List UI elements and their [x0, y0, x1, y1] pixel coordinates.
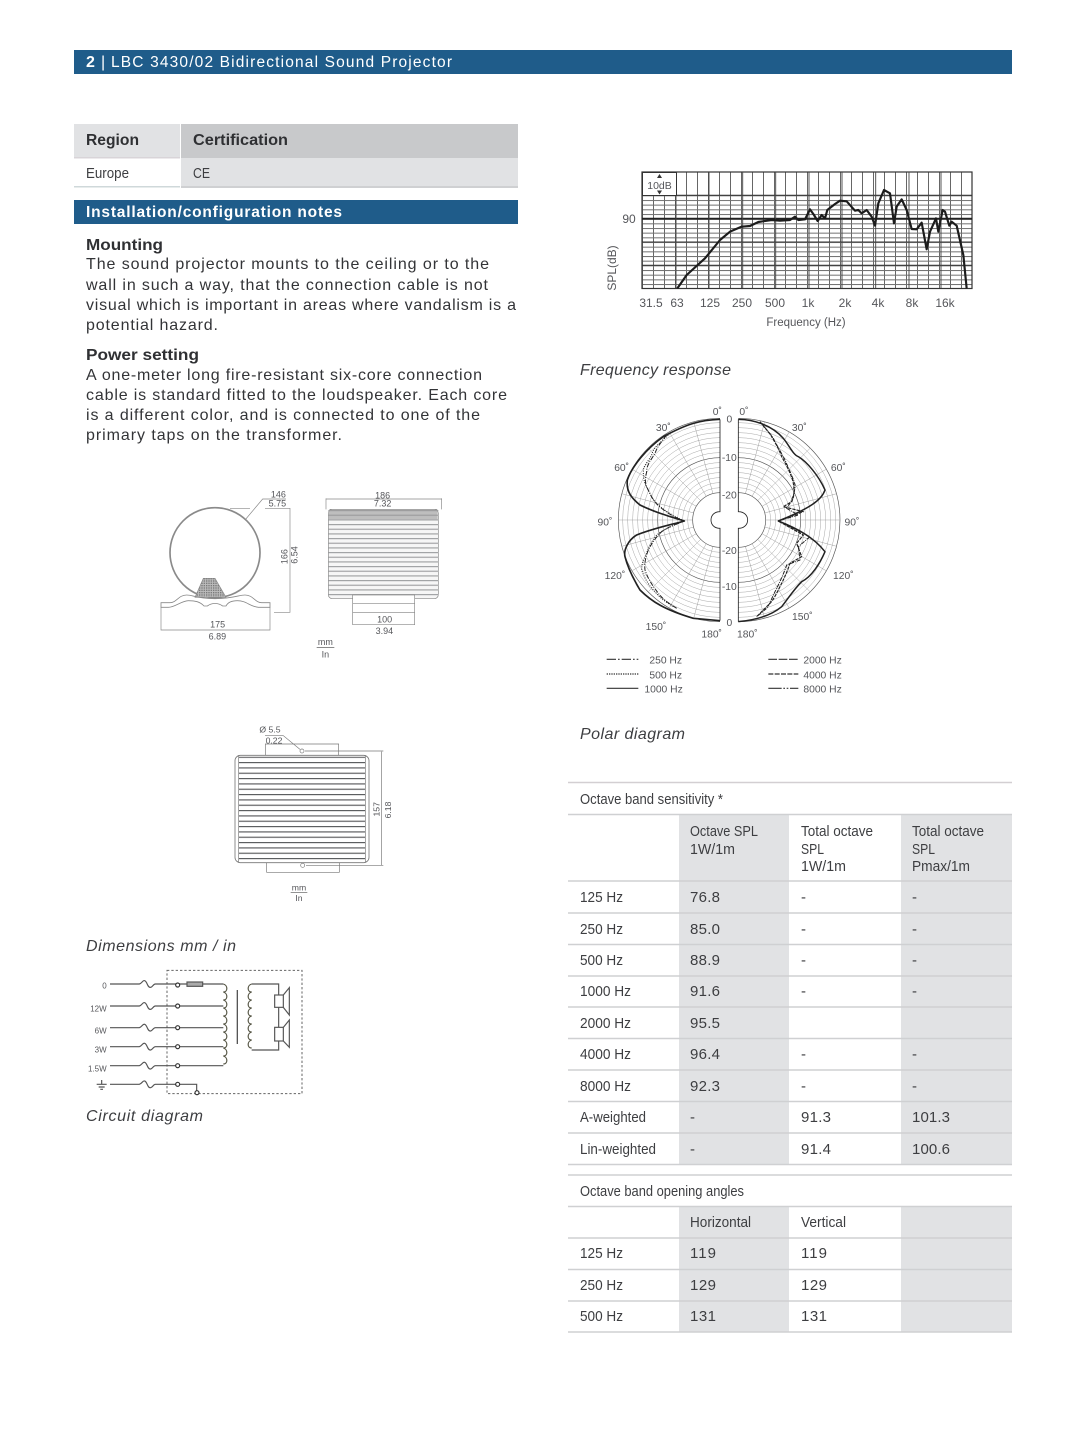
- polar labels: -10: [722, 453, 737, 464]
- text block: mounting: The sound projector mounts to the ceiling or to the: [86, 256, 489, 273]
- table: octave band sensitivity: 100.6: [912, 1141, 950, 1158]
- table: octave band sensitivity: 91.6: [690, 983, 720, 1000]
- section heading: installation notes: Installation/configuration notes: [86, 204, 342, 221]
- table: octave band sensitivity: -: [801, 1046, 806, 1063]
- polar labels: -20: [722, 490, 737, 501]
- polar legend: 4000 Hz: [803, 670, 842, 681]
- table: octave band sensitivity: -: [801, 1078, 806, 1095]
- table: octave band opening angles: 119: [690, 1245, 716, 1262]
- table: octave band sensitivity: Total octave: [801, 823, 873, 840]
- polar labels: 30˚: [792, 422, 807, 434]
- table: octave band sensitivity: -: [801, 952, 806, 969]
- table: octave band sensitivity: 8000 Hz: [580, 1078, 631, 1095]
- certification table: Region: [86, 132, 139, 149]
- certification table: Certification: [193, 132, 288, 149]
- table: octave band opening angles: 131: [801, 1308, 827, 1325]
- table: octave band sensitivity: 85.0: [690, 921, 720, 938]
- circuit diagram: 6W: [95, 1026, 107, 1035]
- table: octave band sensitivity: Total octave: [912, 823, 984, 840]
- dimensions drawing: side and front views: 6.54: [290, 546, 300, 564]
- dimensions drawing: side and front views: 3.94: [376, 626, 393, 636]
- text block: mounting: visual which is important in areas where vandalism is a: [86, 297, 516, 314]
- circuit diagram: 12W: [90, 1005, 107, 1014]
- frequency response chart: 16k: [935, 296, 956, 310]
- circuit diagram: 3W: [95, 1046, 107, 1055]
- table: octave band sensitivity: 101.3: [912, 1109, 950, 1126]
- certification table: Europe: [86, 165, 129, 182]
- polar labels: -10: [722, 582, 737, 593]
- frequency response chart: 90: [622, 212, 636, 226]
- text block: power setting: cable is standard fitted to the loudspeaker. Each core: [86, 387, 507, 404]
- polar labels: 120˚: [605, 570, 625, 582]
- table: octave band opening angles: [568, 1175, 1012, 1332]
- dimensions drawing: side and front views: 7.32: [374, 499, 391, 509]
- text block: power setting: Power setting: [86, 347, 199, 364]
- table: octave band sensitivity: Pmax/1m: [912, 858, 970, 875]
- header bar: LBC 3430/02 Bidirectional Sound Projector: [111, 54, 452, 71]
- text block: power setting: is a different color, and is connected to one of the: [86, 407, 480, 424]
- table: octave band opening angles: 500 Hz: [580, 1308, 623, 1325]
- table: octave band sensitivity: 4000 Hz: [580, 1046, 631, 1063]
- frequency response chart: 125: [700, 296, 720, 310]
- dimensions drawing: side and front views: 100: [377, 614, 392, 624]
- table: octave band sensitivity: SPL: [912, 841, 935, 858]
- table: octave band sensitivity: Octave band sensitivity *: [580, 791, 723, 808]
- polar labels: 180˚: [701, 628, 722, 640]
- table: octave band sensitivity: SPL: [801, 841, 824, 858]
- dimensions drawing: side and front views: [161, 490, 442, 659]
- polar legend: 500 Hz: [649, 670, 682, 681]
- polar labels: 90˚: [598, 517, 612, 529]
- table: octave band sensitivity: 1W/1m: [801, 858, 846, 875]
- header bar: 2: [86, 54, 95, 71]
- table: octave band sensitivity: -: [690, 1141, 695, 1158]
- dimensions drawing: side and front views: 5.75: [269, 499, 286, 509]
- left half grid: [618, 418, 720, 622]
- table: octave band sensitivity: 88.9: [690, 952, 720, 969]
- table: octave band sensitivity: 95.5: [690, 1015, 720, 1032]
- table: octave band sensitivity: [568, 782, 1012, 1164]
- frequency response chart: 31.5: [639, 296, 663, 310]
- table: octave band opening angles: 129: [801, 1277, 827, 1294]
- table: octave band sensitivity: 96.4: [690, 1046, 720, 1063]
- polar legend: 2000 Hz: [803, 656, 842, 667]
- circuit diagram: 0: [102, 982, 107, 991]
- table: octave band opening angles: Vertical: [801, 1214, 846, 1231]
- frequency response chart: 4k: [872, 296, 885, 310]
- polar labels: 30˚: [656, 422, 671, 434]
- table: octave band sensitivity: -: [801, 983, 806, 1000]
- polar legend: 250 Hz: [649, 656, 682, 667]
- dimensions drawing: side and front views: 6.89: [209, 631, 226, 641]
- dimensions drawing: top view: 6.18: [383, 801, 393, 818]
- table: octave band sensitivity: A-weighted: [580, 1109, 646, 1126]
- polar labels: 0: [726, 415, 732, 426]
- dimensions drawing: side and front views: 186: [375, 490, 390, 500]
- polar labels: 150˚: [646, 621, 666, 633]
- table: octave band opening angles: Horizontal: [690, 1214, 751, 1231]
- caption: dimensions: Dimensions mm / in: [86, 938, 236, 955]
- table: octave band sensitivity: 2000 Hz: [580, 1015, 631, 1032]
- polar labels: 0˚: [713, 406, 722, 418]
- table: octave band sensitivity: 125 Hz: [580, 889, 623, 906]
- section heading: installation notes: [74, 200, 518, 224]
- polar labels: 60˚: [831, 462, 846, 474]
- dimensions drawing: top view: 0.22: [266, 735, 283, 745]
- polar labels: 180˚: [737, 628, 758, 640]
- frequency response chart: 250: [732, 296, 752, 310]
- table: octave band sensitivity: -: [801, 889, 806, 906]
- dimensions drawing: top view: [235, 725, 393, 903]
- table: octave band opening angles: 125 Hz: [580, 1245, 623, 1262]
- dimensions drawing: top view: In: [295, 893, 303, 903]
- table: octave band sensitivity: 76.8: [690, 889, 720, 906]
- frequency response chart: Frequency (Hz): [766, 317, 846, 329]
- circuit diagram: [88, 970, 302, 1095]
- certification table: [74, 124, 518, 188]
- caption: polar diagram: Polar diagram: [580, 726, 685, 743]
- table: octave band sensitivity: 91.4: [801, 1141, 831, 1158]
- response curves: [625, 419, 825, 622]
- table: octave band sensitivity: 92.3: [690, 1078, 720, 1095]
- table: octave band sensitivity: 1000 Hz: [580, 983, 631, 1000]
- table: octave band sensitivity: -: [801, 921, 806, 938]
- frequency response chart: 10dB: [647, 180, 672, 192]
- polar legend: 8000 Hz: [803, 685, 842, 696]
- dimensions drawing: side and front views: 166: [279, 549, 289, 564]
- polar labels: [598, 406, 859, 640]
- text block: power setting: A one-meter long fire-resistant six-core connection: [86, 367, 482, 384]
- frequency response chart: 8k: [906, 296, 919, 310]
- polar diagram: [598, 406, 859, 696]
- text block: mounting: Mounting: [86, 237, 163, 254]
- table: octave band opening angles: 250 Hz: [580, 1277, 623, 1294]
- table: octave band opening angles: 119: [801, 1245, 827, 1262]
- dimensions drawing: top view: 157: [371, 802, 381, 817]
- table: octave band sensitivity: 500 Hz: [580, 952, 623, 969]
- text block: mounting: [85, 237, 516, 334]
- polar labels: 0˚: [739, 406, 749, 418]
- table: octave band opening angles: 131: [690, 1308, 716, 1325]
- table: octave band sensitivity: 250 Hz: [580, 921, 623, 938]
- circuit diagram: 1.5W: [88, 1064, 107, 1073]
- table: octave band sensitivity: -: [912, 889, 917, 906]
- frequency response chart: 2k: [839, 296, 852, 310]
- certification table: CE: [193, 165, 210, 182]
- text block: power setting: primary taps on the transformer.: [86, 427, 342, 444]
- caption: frequency response: Frequency response: [580, 362, 731, 379]
- polar labels: 60˚: [614, 462, 629, 474]
- dimensions drawing: top view: Ø 5.5: [259, 725, 281, 735]
- frequency response chart: [605, 172, 972, 329]
- header bar: [74, 50, 1012, 74]
- dimensions drawing: side and front views: In: [322, 649, 329, 659]
- dimensions drawing: side and front views: 175: [210, 619, 225, 629]
- table: octave band sensitivity: -: [690, 1109, 695, 1126]
- dimensions drawing: top view: mm: [292, 882, 306, 892]
- polar labels: -20: [722, 546, 737, 557]
- table: octave band opening angles: 129: [690, 1277, 716, 1294]
- page canvas: [74, 50, 1012, 1333]
- polar labels: 0: [726, 618, 732, 629]
- text block: mounting: potential hazard.: [86, 317, 218, 334]
- polar labels: 150˚: [792, 611, 813, 623]
- frequency response chart: 1k: [802, 296, 815, 310]
- table: octave band sensitivity: 91.3: [801, 1109, 831, 1126]
- dimensions drawing: side and front views: 146: [271, 490, 286, 500]
- table: octave band sensitivity: 1W/1m: [690, 841, 735, 858]
- polar legend: 1000 Hz: [644, 685, 683, 696]
- table: octave band opening angles: Octave band opening angles: [580, 1183, 744, 1200]
- table: octave band sensitivity: -: [912, 952, 917, 969]
- polar labels: 120˚: [833, 570, 854, 582]
- table: octave band sensitivity: -: [912, 1078, 917, 1095]
- table: octave band sensitivity: -: [912, 983, 917, 1000]
- text block: power setting: [86, 347, 507, 444]
- caption: circuit diagram: Circuit diagram: [86, 1108, 203, 1125]
- table: octave band sensitivity: Lin-weighted: [580, 1141, 656, 1158]
- text block: mounting: wall in such a way, that the connection cable is not: [85, 277, 489, 294]
- table: octave band sensitivity: -: [912, 1046, 917, 1063]
- header bar: |: [101, 54, 105, 71]
- polar labels: 90˚: [845, 517, 859, 529]
- table: octave band sensitivity: -: [912, 921, 917, 938]
- table: octave band sensitivity: Octave SPL: [690, 823, 758, 840]
- right half grid: [738, 418, 840, 622]
- frequency response chart: SPL(dB): [605, 245, 619, 291]
- frequency response chart: 63: [670, 296, 684, 310]
- polar legend: [607, 656, 842, 696]
- frequency response chart: 500: [765, 296, 785, 310]
- dimensions drawing: side and front views: mm: [318, 637, 333, 647]
